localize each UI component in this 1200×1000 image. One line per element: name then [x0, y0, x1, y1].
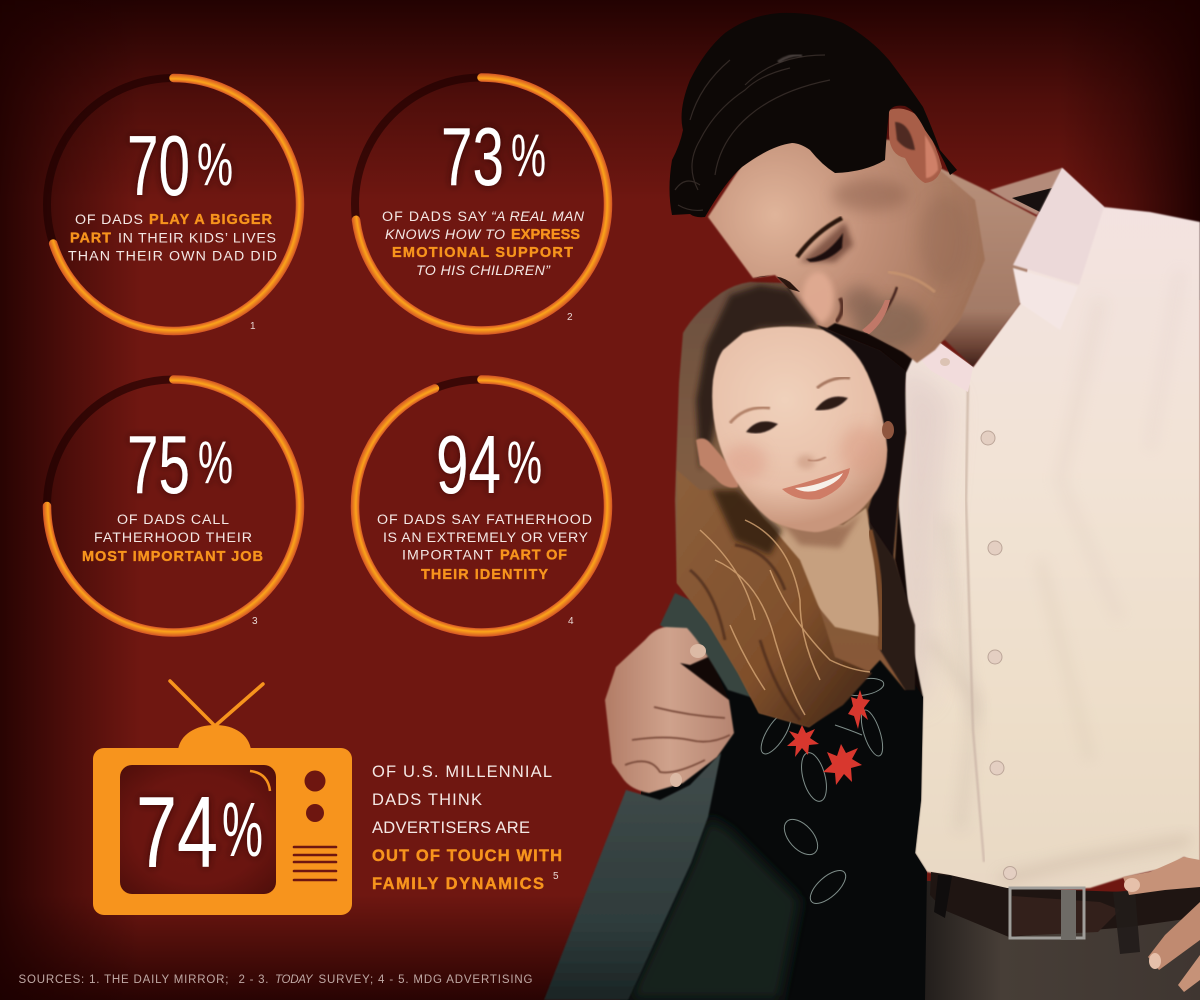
number: 73 [441, 110, 504, 203]
sources: TODAY [275, 974, 314, 986]
photo: father and daughter [544, 13, 1200, 1000]
tv description [372, 763, 562, 893]
description: OF DADS CALL [117, 512, 229, 528]
description: IMPORTANT [402, 548, 493, 564]
description [68, 212, 277, 264]
knobs [304, 770, 326, 822]
daughter's face [712, 327, 887, 532]
daughter's dark hair [696, 285, 915, 690]
description: OF DADS SAY FATHERHOOD [377, 512, 592, 528]
tv description: FAMILY DYNAMICS [372, 875, 544, 893]
description: OF DADS SAY [382, 209, 488, 225]
description: OF DADS [75, 212, 143, 228]
sources [18, 974, 533, 986]
flowers [787, 690, 870, 785]
father's neck [880, 168, 1037, 367]
description: THEIR IDENTITY [421, 567, 548, 583]
description: PART OF [500, 548, 567, 564]
sources: SOURCES: 1. THE DAILY MIRROR; [18, 974, 228, 986]
tv description: ADVERTISERS ARE [372, 819, 530, 837]
father's right hand on hip [1123, 857, 1200, 992]
daughter's shoulder sleeve [660, 593, 760, 700]
footnote: 3 [252, 616, 258, 627]
description [82, 512, 263, 565]
number: % [198, 429, 233, 496]
speaker grille [294, 847, 336, 880]
daughter's right strand [870, 530, 881, 650]
father's left hand [605, 627, 734, 793]
tv body [93, 748, 352, 915]
number: % [197, 131, 233, 198]
father's hair [670, 13, 957, 217]
shirt embroidery [756, 676, 887, 909]
silhouette base behind figures [640, 285, 926, 880]
father's belt [930, 872, 1200, 954]
tv dome [178, 725, 251, 750]
sources: 2 - 3. [238, 974, 268, 986]
daughter's ear [696, 438, 738, 488]
number: 94 [436, 418, 501, 511]
description: PART [70, 230, 111, 246]
number: 70 [127, 119, 190, 214]
antenna [170, 681, 263, 726]
stat ring 3: 75% [47, 380, 300, 632]
father's trousers [916, 880, 1200, 1000]
screen glare [250, 771, 270, 791]
footnote: 5 [553, 871, 559, 882]
daughter's lower shirt [628, 817, 800, 1000]
footnote: 1 [250, 321, 256, 332]
chest shadow [775, 512, 862, 548]
number: % [511, 122, 546, 189]
number: 74 [136, 777, 218, 889]
footnote: 4 [568, 616, 574, 627]
daughter's lower hair [677, 470, 872, 727]
footnote: 2 [567, 312, 573, 323]
daughter's arm sleeve [544, 753, 721, 1000]
tv description: OUT OF TOUCH WITH [372, 847, 562, 865]
father's face [708, 130, 985, 363]
number: % [507, 429, 542, 496]
description: FATHERHOOD THEIR [94, 530, 252, 546]
stat ring 4: 94% [355, 380, 608, 632]
daughter's neck and chest [755, 505, 881, 637]
number: % [222, 787, 263, 873]
description: TO HIS CHILDREN” [416, 263, 551, 279]
mouth [782, 468, 850, 500]
leaves [756, 676, 887, 909]
father's ear [889, 109, 942, 183]
number: 75 [127, 418, 190, 511]
description: EXPRESS [511, 227, 580, 243]
tv description: OF U.S. MILLENNIAL [372, 763, 552, 781]
description: IN THEIR KIDS’ LIVES [118, 230, 276, 246]
daughter's back hair [675, 282, 912, 727]
eyebrows [730, 408, 770, 423]
tv description: DADS THINK [372, 791, 482, 809]
description [377, 512, 592, 583]
icon: television with 74% [93, 681, 352, 915]
father's shirt collar [915, 168, 1104, 392]
sources: SURVEY; 4 - 5. MDG ADVERTISING [318, 974, 533, 986]
description [382, 209, 585, 279]
daughter's torso [620, 622, 927, 1000]
description: EMOTIONAL SUPPORT [392, 245, 573, 261]
father's shirt [898, 168, 1200, 892]
dark hair under chin [712, 490, 782, 555]
father's back collar [990, 168, 1062, 215]
eyes [746, 421, 778, 433]
description: “A REAL MAN [491, 209, 585, 225]
stat ring 1: 70% [47, 78, 300, 332]
daughter's far ear [882, 421, 894, 439]
description: KNOWS HOW TO [385, 227, 505, 243]
description: IS AN EXTREMELY OR VERY [383, 530, 589, 546]
tv screen [120, 765, 276, 894]
shirt buttons [981, 431, 1016, 880]
description: PLAY A BIGGER [149, 212, 273, 228]
stat ring 2: 73% [355, 78, 608, 330]
description: THAN THEIR OWN DAD DID [68, 248, 277, 264]
description: MOST IMPORTANT JOB [82, 549, 263, 565]
